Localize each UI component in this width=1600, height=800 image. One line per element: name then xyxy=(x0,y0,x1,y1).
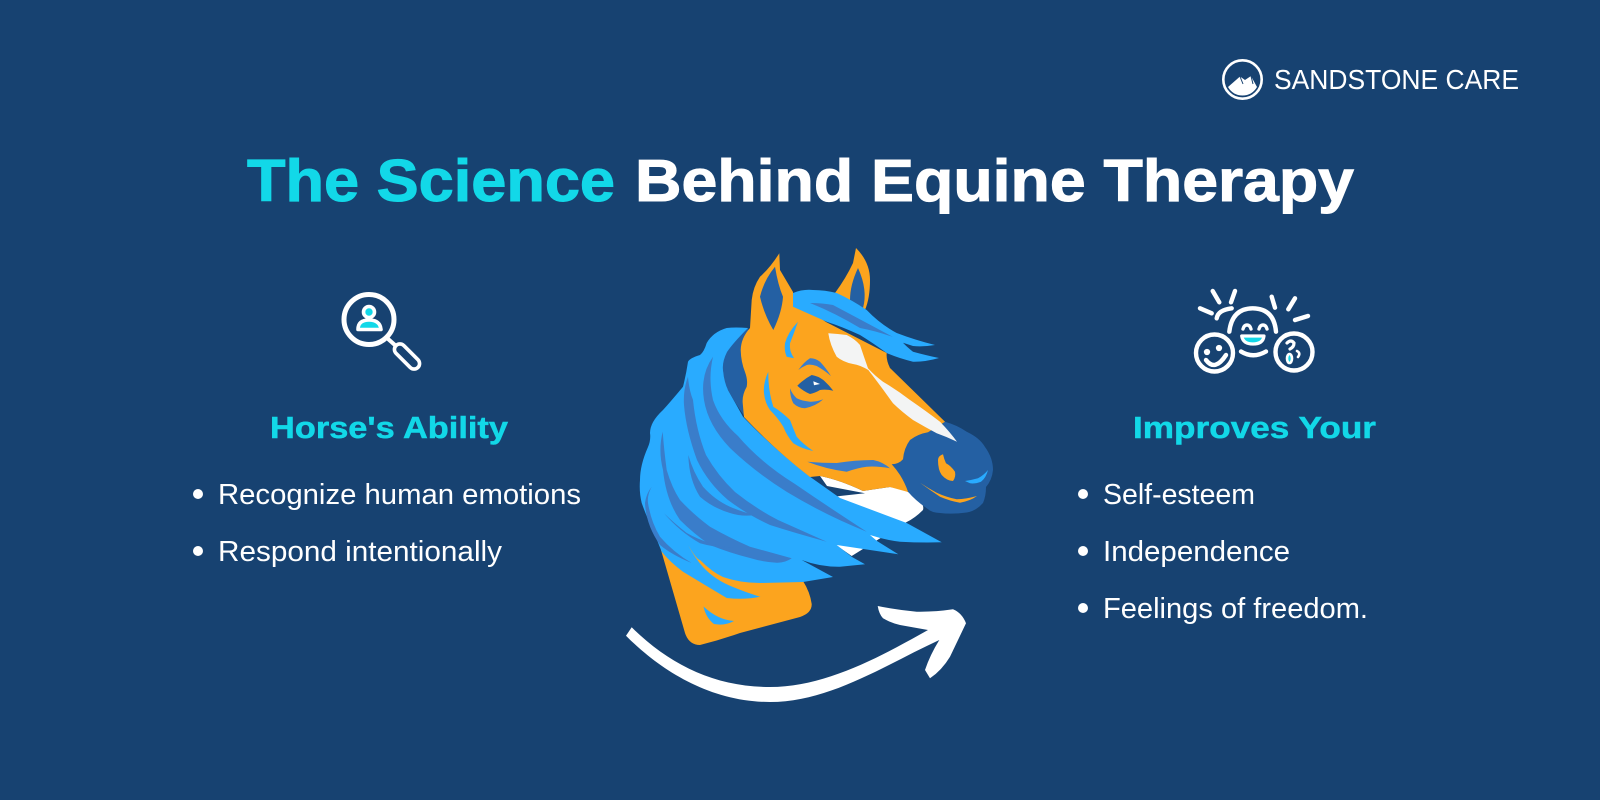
right ear xyxy=(835,248,870,310)
curved arrow xyxy=(626,606,966,702)
nostril xyxy=(938,454,955,481)
bullet list: horse's abilities: Recognize human emotions xyxy=(218,479,581,511)
bullet list: horse's abilities: Respond intentionally xyxy=(218,536,502,568)
title: The Science xyxy=(247,148,615,214)
bullet list: improvements: Independence xyxy=(1103,536,1290,568)
logo: Sandstone Care xyxy=(1223,60,1519,99)
dark mane shadow xyxy=(723,328,760,417)
white blaze xyxy=(828,333,957,442)
bullet list: horse's abilities xyxy=(193,479,581,568)
title: Behind Equine Therapy xyxy=(635,148,1354,214)
icon: three smiling faces xyxy=(1196,291,1312,372)
white jaw xyxy=(800,476,923,556)
icon: magnifying glass with person xyxy=(344,294,422,371)
eye xyxy=(790,358,833,408)
bullet list: improvements: Feelings of freedom. xyxy=(1103,593,1368,625)
horse illustration xyxy=(640,248,993,645)
nose highlight xyxy=(965,470,988,483)
panel: improves your xyxy=(1078,291,1376,625)
title xyxy=(247,148,1354,214)
orange neck streak xyxy=(688,545,807,597)
cheek highlights xyxy=(764,322,813,451)
panel: horse's ability xyxy=(193,294,581,568)
jaw strand xyxy=(807,460,890,472)
logo: Sandstone Care: SANDSTONE CARE xyxy=(1274,64,1519,95)
horse neck xyxy=(661,520,812,645)
heading: Horse's Ability: Horse's Ability xyxy=(270,410,509,445)
muzzle xyxy=(892,422,993,514)
heading: Improves Your: Improves Your xyxy=(1133,410,1376,445)
neck highlight xyxy=(704,606,734,625)
mane darker strands xyxy=(645,357,867,563)
left ear inner xyxy=(760,267,783,330)
flowing mane xyxy=(640,328,942,599)
jaw shadow notch xyxy=(811,476,865,498)
forelock strand xyxy=(810,303,893,337)
horse head xyxy=(741,253,945,492)
forelock xyxy=(793,290,939,362)
mouth line xyxy=(920,483,977,503)
bullet list: improvements: Self-esteem xyxy=(1103,479,1255,511)
bullet list: improvements xyxy=(1078,479,1368,625)
